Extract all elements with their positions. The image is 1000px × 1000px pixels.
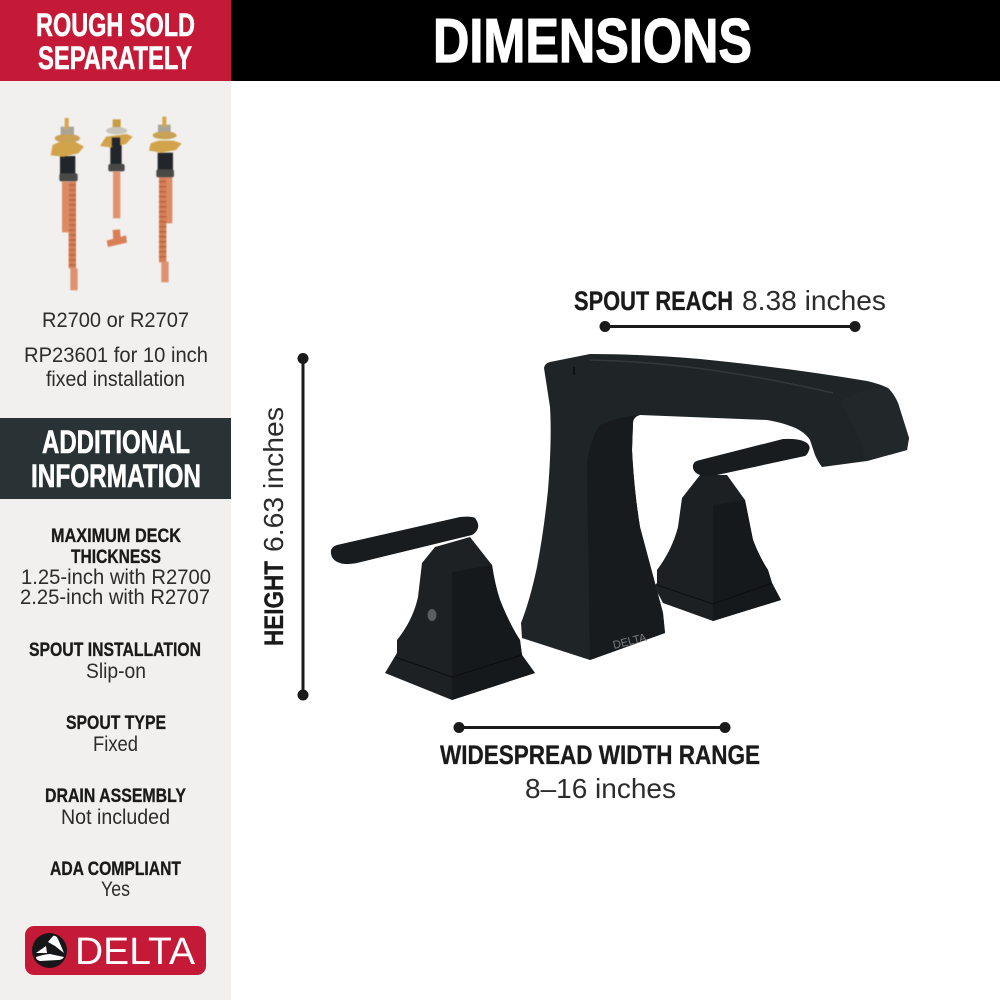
faucet: [331, 354, 909, 700]
spec: maximum deck thickness: MAXIMUM DECK: [51, 526, 181, 547]
spec: spout installation: SPOUT INSTALLATION: [29, 640, 201, 661]
heading: rough sold separately: SEPARATELY: [38, 40, 192, 76]
spec: ada compliant: Yes: [101, 878, 130, 901]
dimension: widespread width range: WIDESPREAD WIDTH RANGE: [440, 740, 760, 770]
dimension: height: [258, 353, 308, 700]
dimension: widespread width range: 8–16 inches: [525, 773, 676, 804]
spout: DELTA: [612, 632, 648, 652]
spec: maximum deck thickness: 1.25-inch with R2700: [21, 566, 211, 589]
spec: spout type: SPOUT TYPE: [66, 713, 166, 734]
text: rough part numbers: [24, 309, 208, 391]
spec: spout installation: [29, 640, 201, 683]
dimension: spout reach: 8.38 inches: [742, 285, 886, 316]
spec: spout type: Fixed: [93, 733, 138, 756]
heading: rough sold separately: [0, 0, 231, 81]
logo: delta: DELTA: [75, 931, 196, 973]
left handle: [331, 517, 535, 700]
spec: spout type: [66, 713, 166, 756]
heading: rough sold separately: ROUGH SOLD: [36, 7, 195, 43]
spec: drain assembly: [45, 786, 186, 829]
spec: spout installation: Slip-on: [86, 660, 146, 683]
dimension: height: HEIGHT: [259, 561, 289, 646]
dimension: height: 6.63 inches: [258, 407, 289, 552]
icon: rough-in valves: [51, 117, 182, 290]
dimension: widespread width range: [440, 722, 760, 804]
right valve: [149, 117, 182, 282]
right handle: [654, 439, 810, 621]
spec: drain assembly: Not included: [61, 806, 170, 829]
spec: maximum deck thickness: [20, 526, 211, 609]
text: rough part numbers: RP23601 for 10 inch: [24, 344, 208, 367]
heading: additional information: INFORMATION: [31, 458, 201, 494]
heading: additional information: ADDITIONAL: [42, 424, 190, 460]
left valve: [51, 118, 84, 290]
heading: additional information: [0, 418, 231, 499]
spout: [521, 354, 909, 660]
heading: dimensions: DIMENSIONS: [433, 7, 752, 76]
text: rough part numbers: R2700 or R2707: [42, 309, 189, 332]
logo: delta: [25, 926, 206, 975]
center valve: [100, 119, 133, 218]
spec: maximum deck thickness: 2.25-inch with R2707: [20, 586, 210, 609]
heading: dimensions: [231, 0, 1000, 81]
dimension: spout reach: [574, 285, 886, 332]
panel: sidebar: [0, 81, 231, 1000]
copper tee: [107, 229, 127, 247]
spec: ada compliant: ADA COMPLIANT: [50, 859, 181, 880]
spec: drain assembly: DRAIN ASSEMBLY: [45, 786, 186, 807]
text: rough part numbers: fixed installation: [46, 368, 185, 391]
spec: maximum deck thickness: THICKNESS: [71, 547, 161, 568]
spec: ada compliant: [50, 859, 181, 901]
dimension: spout reach: SPOUT REACH: [574, 286, 733, 316]
